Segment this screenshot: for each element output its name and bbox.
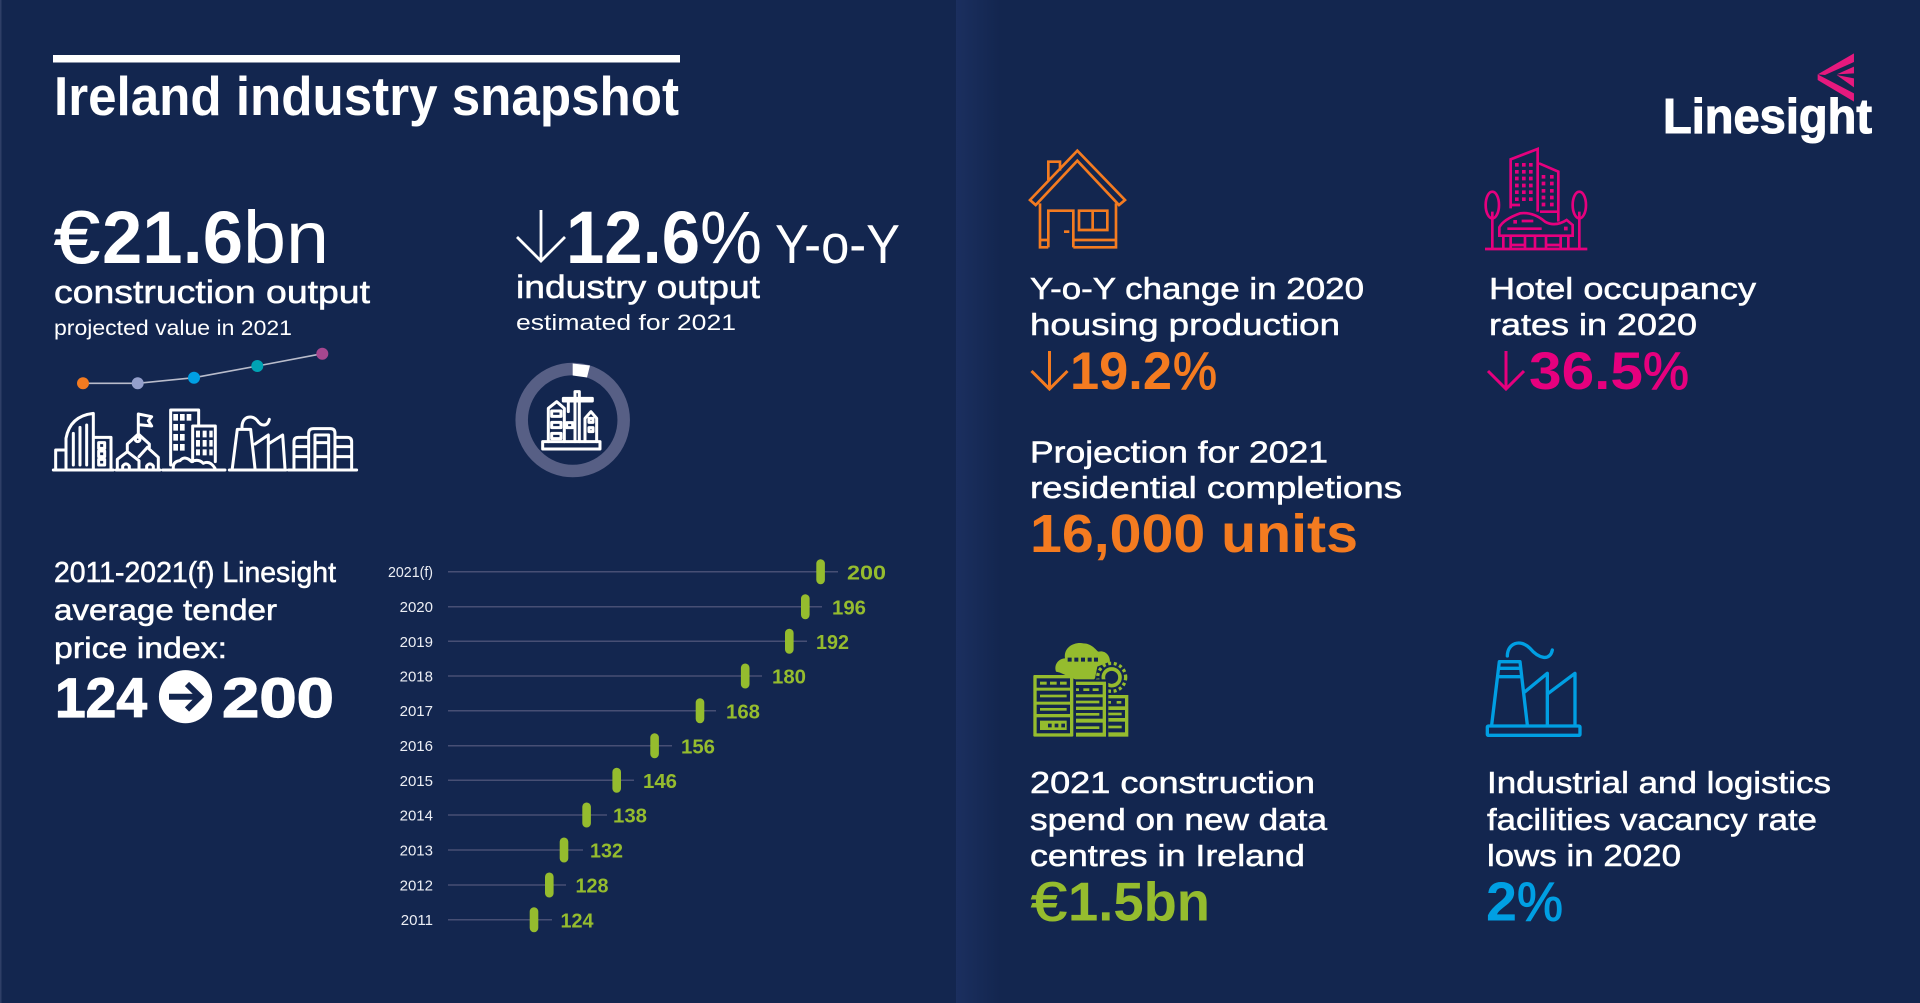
row 2019: [400, 629, 849, 654]
stat: housing production: Y-o-Y change in 2020: [1030, 271, 1364, 306]
row 2017: 2017: [400, 703, 433, 720]
row 2011: 2011: [401, 912, 433, 929]
stat: construction output: €: [54, 196, 100, 279]
stat: data centres: €: [1031, 870, 1067, 932]
stat: housing production: 19.2: [1070, 342, 1172, 401]
row 2019: 192: [816, 632, 849, 654]
row 2020: [400, 594, 866, 620]
row 2020: 196: [832, 598, 866, 620]
icon: factory: [229, 417, 286, 470]
donut gauge with crane icon: [522, 364, 624, 471]
row 2016: [400, 733, 715, 758]
row 2016: 156: [681, 736, 715, 758]
row 2015: 2015: [400, 773, 433, 790]
stat: hotel occupancy: 36.5: [1529, 342, 1643, 401]
stat: residential completions: residential completions: [1030, 470, 1402, 505]
chart: tender price index by year: [388, 559, 886, 932]
line chart: construction output trend: [77, 348, 328, 389]
stat: hotel occupancy: Hotel occupancy: [1489, 271, 1757, 306]
heading: tender price index: 124: [55, 666, 147, 729]
stat: residential completions: [1030, 434, 1402, 564]
row 2014: [400, 802, 647, 828]
heading: tender price index: average tender: [54, 594, 277, 627]
stat: industrial vacancy: [1486, 765, 1831, 932]
stat: data centres: 1.5bn: [1068, 870, 1210, 932]
row 2018: [400, 664, 806, 689]
arrow: down: [517, 210, 565, 261]
row 2012: [400, 872, 608, 898]
stat: data centres: 2021 construction: [1030, 765, 1315, 800]
stat: construction output: 21.6: [102, 196, 243, 279]
stat: industry output change: industry output: [516, 269, 760, 305]
stat: data centres: centres in Ireland: [1030, 838, 1305, 873]
stat: data centres: spend on new data: [1030, 802, 1328, 837]
row 2013: 132: [590, 841, 623, 863]
title: Ireland industry snapshot: [54, 65, 679, 127]
icon: office block: [288, 429, 357, 470]
stat: housing production: housing production: [1030, 307, 1340, 342]
heading: tender price index: 200: [222, 666, 334, 729]
row 2012: 128: [576, 876, 608, 898]
heading: tender price index: [54, 557, 336, 729]
icon: hotel: [1485, 149, 1587, 249]
row 2018: 2018: [400, 668, 433, 686]
stat: construction output: bn: [243, 196, 329, 279]
stat: hotel occupancy: %: [1643, 342, 1689, 401]
stat: industry output change: [516, 196, 900, 335]
icon: industrial factory: [1487, 643, 1580, 735]
logo: Linesight: [1663, 53, 1872, 144]
stat: industrial vacancy: lows in 2020: [1487, 838, 1681, 873]
icon: commercial tower: [53, 413, 113, 470]
row 2019: 2019: [400, 634, 433, 651]
row 2015: 146: [643, 771, 677, 793]
icon: data centre: [1033, 643, 1128, 739]
row 2013: 2013: [400, 842, 433, 860]
row 2021(f): 200: [847, 562, 886, 584]
stat: hotel occupancy: rates in 2020: [1489, 307, 1697, 342]
stat: hotel occupancy: [1488, 271, 1757, 401]
row 2018: 180: [772, 667, 806, 689]
stat: construction output: projected value in 2021: [54, 317, 292, 340]
heading: tender price index: 2011-2021(f) Linesight: [54, 557, 336, 589]
icons: building sectors row: [53, 410, 357, 470]
stat: industrial vacancy: facilities vacancy rate: [1487, 802, 1817, 837]
row 2016: 2016: [400, 738, 433, 755]
icon: school: [116, 414, 160, 470]
stat: data centres: [1030, 765, 1328, 932]
icon: office towers: [163, 410, 225, 470]
row 2020: 2020: [400, 599, 433, 616]
stat: industry output change: %: [700, 196, 762, 279]
stat: industry output change: Y-o-Y: [775, 213, 900, 275]
stat: industry output change: estimated for 2021: [516, 310, 736, 335]
stat: industrial vacancy: %: [1517, 870, 1563, 932]
row 2014: 2014: [400, 808, 433, 824]
row 2017: 168: [726, 701, 760, 723]
stat: industrial vacancy: Industrial and logistics: [1487, 765, 1831, 800]
row 2021(f): 2021(f): [388, 564, 433, 581]
row 2013: [400, 838, 623, 863]
heading: tender price index: price index:: [54, 632, 227, 665]
row 2012: 2012: [400, 878, 433, 894]
row 2011: 124: [560, 910, 594, 932]
stat: construction output: construction output: [54, 274, 370, 310]
row 2011: [401, 907, 594, 932]
stat: industrial vacancy: 2: [1486, 870, 1517, 932]
row 2017: [400, 698, 760, 723]
stat: residential completions: Projection for 2021: [1030, 434, 1328, 470]
icon: house: [1030, 151, 1125, 247]
stat: residential completions: 16,000 units: [1030, 504, 1358, 564]
row 2015: [400, 768, 677, 793]
stat: industry output change: 12.6: [566, 196, 700, 279]
row 2021(f): [388, 559, 886, 584]
row 2014: 138: [613, 806, 647, 828]
stat: housing production: %: [1173, 342, 1217, 401]
stat: housing production: [1030, 271, 1364, 401]
stat: construction output: [54, 196, 370, 340]
logo: Linesight: Linesight: [1663, 90, 1872, 144]
